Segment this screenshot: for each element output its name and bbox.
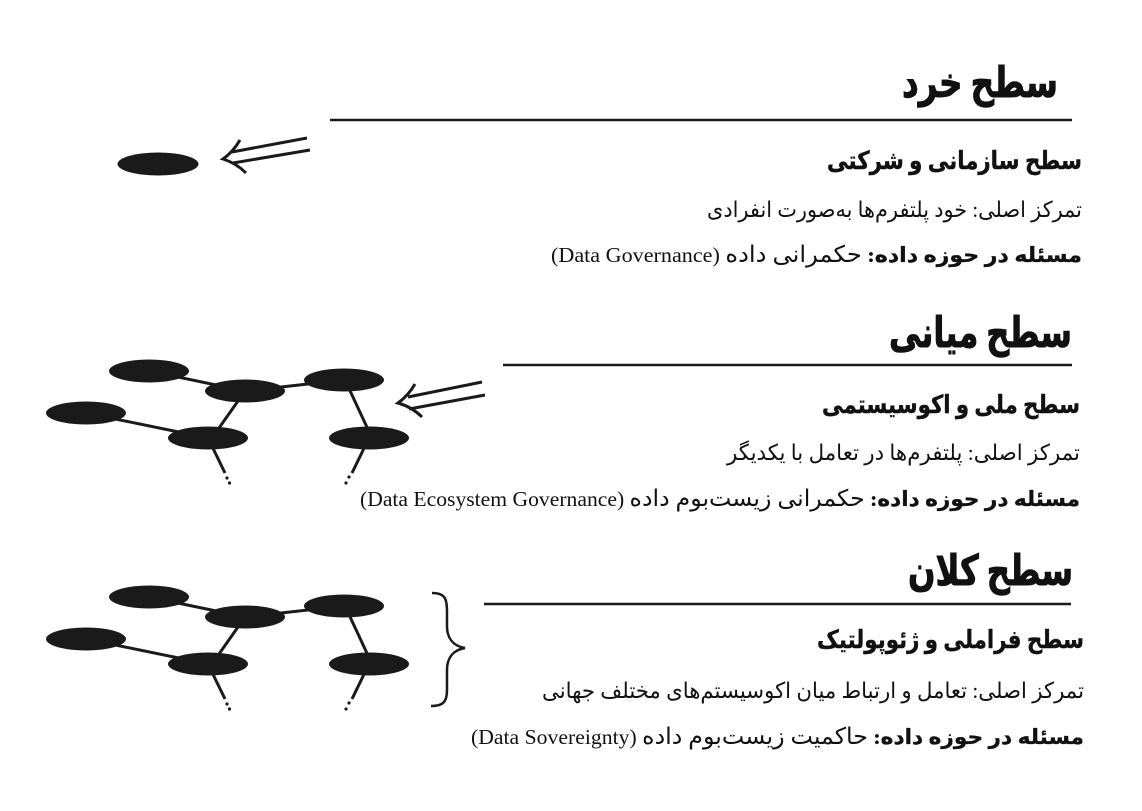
heading: macro level: سطح کلان — [908, 549, 1073, 596]
heading: meso level: سطح میانی — [889, 311, 1072, 358]
icon: single node — [118, 152, 198, 176]
section: micro level — [118, 61, 1082, 268]
rule: meso level — [503, 364, 1072, 366]
text: main focus: تمرکز اصلی: پلتفرم‌ها در تعامل با یکدیگر — [726, 440, 1080, 466]
arrow: pointing at network — [398, 382, 485, 417]
subheading: transnational and geopolitical level: سطح فراملی و ژئوپولتیک — [817, 627, 1084, 655]
text: data issue: مسئله در حوزه داده: حاکمیت زیست‌بوم داده (Data Sovereignty) — [471, 724, 1084, 750]
rule: macro level — [484, 603, 1071, 605]
heading: micro level: سطح خرد — [902, 61, 1058, 108]
text: data issue: مسئله در حوزه داده: حکمرانی داده (Data Governance) — [551, 242, 1082, 268]
subheading: organisational level: سطح سازمانی و شرکتی — [827, 148, 1082, 176]
text: main focus: تمرکز اصلی: خود پلتفرم‌ها به‌صورت انفرادی — [707, 197, 1082, 223]
section: macro level — [46, 549, 1084, 750]
text: main focus: تمرکز اصلی: تعامل و ارتباط میان اکوسیستم‌های مختلف جهانی — [542, 678, 1084, 704]
rule: micro level — [330, 119, 1072, 121]
text: data issue: مسئله در حوزه داده: حکمرانی زیست‌بوم داده (Data Ecosystem Governance) — [360, 486, 1080, 512]
diagram: network of ecosystems — [46, 586, 409, 711]
subheading: national and ecosystem level: سطح ملی و اکوسیستمی — [822, 392, 1080, 420]
icon: curly brace — [431, 593, 465, 706]
diagram: platform network — [46, 360, 409, 485]
arrow: pointing at single node — [223, 138, 310, 173]
section: meso level — [46, 311, 1080, 512]
